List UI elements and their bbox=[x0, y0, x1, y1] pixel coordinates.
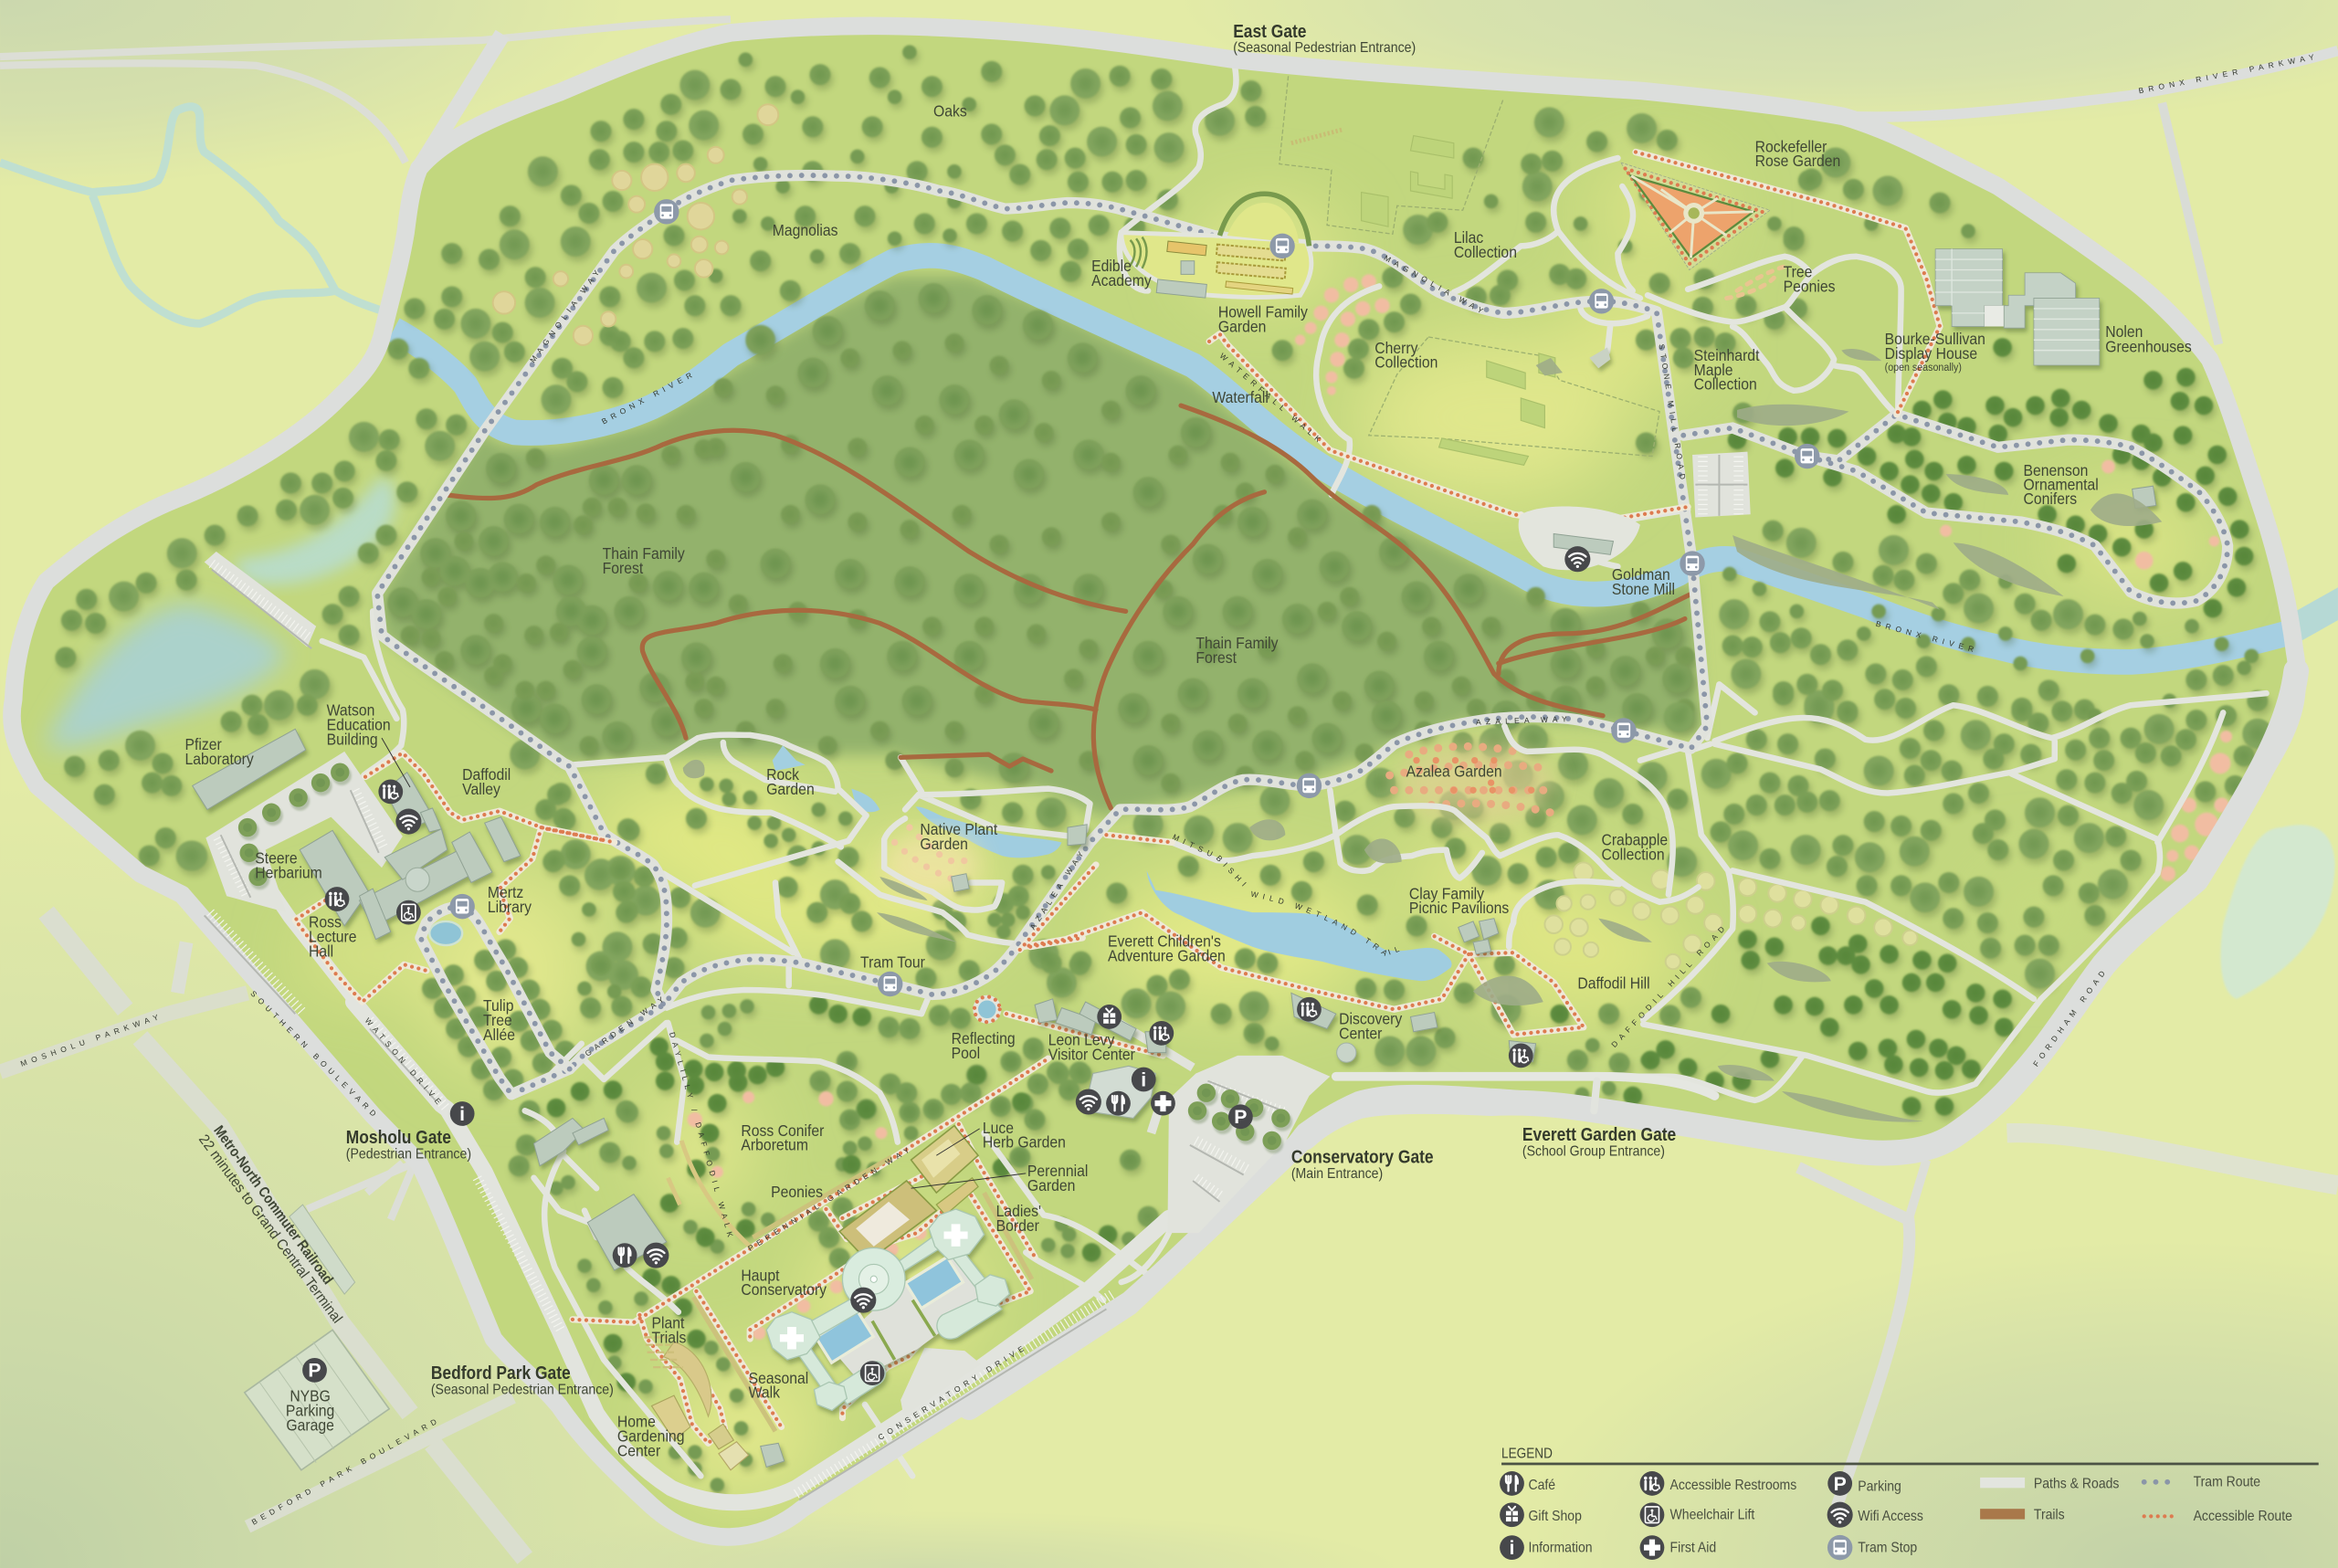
garden labels: Edible bbox=[1091, 257, 1132, 275]
garden labels: Academy bbox=[1091, 271, 1152, 289]
garden labels bbox=[184, 101, 2192, 1460]
garden labels: Lecture bbox=[309, 928, 357, 946]
garden labels: Everett Children's bbox=[1108, 932, 1221, 951]
garden labels: Arboretum bbox=[741, 1136, 808, 1154]
road names: WATSON DRIVE bbox=[363, 1016, 447, 1110]
garden labels: Benenson bbox=[2023, 461, 2088, 479]
garden labels: Luce bbox=[983, 1119, 1014, 1137]
garden labels: Howell Family bbox=[1218, 303, 1308, 321]
pink flowering trees bbox=[688, 274, 2232, 1340]
garden labels: Steere bbox=[255, 848, 298, 868]
other small buildings bbox=[761, 347, 2156, 1467]
garden labels: Waterfall bbox=[1212, 388, 1269, 406]
leader lines bbox=[382, 738, 1026, 1188]
legend: Wifi Access bbox=[1858, 1510, 1923, 1524]
garden labels: Tulip bbox=[483, 996, 514, 1015]
road names: DAYLILLY / DAFFODIL WALK bbox=[668, 1031, 736, 1243]
garden labels: Home bbox=[617, 1413, 656, 1431]
garden labels: Lilac bbox=[1454, 228, 1483, 247]
railroad note: Metro-North Commuter Railroad bbox=[210, 1122, 336, 1288]
garden labels: Maple bbox=[1694, 361, 1733, 379]
garden labels: Garden bbox=[920, 835, 968, 853]
garden labels: Crabapple bbox=[1601, 831, 1668, 849]
road names: AZALEA WAY bbox=[1476, 714, 1572, 727]
garden labels: Oaks bbox=[933, 101, 967, 121]
garden labels: Border bbox=[996, 1216, 1039, 1235]
reflecting pool bbox=[973, 995, 1001, 1024]
garden labels: Garden bbox=[1218, 318, 1266, 336]
road names: DAFFODIL HILL ROAD bbox=[1609, 921, 1730, 1049]
legend: Accessible Restrooms bbox=[1670, 1478, 1796, 1493]
garden labels: Walk bbox=[749, 1384, 781, 1402]
garden labels: Ross Conifer bbox=[741, 1121, 824, 1140]
garden labels: Bourke-Sullivan bbox=[1885, 330, 1985, 348]
garden labels: Collection bbox=[1374, 353, 1438, 372]
garden labels: Steinhardt bbox=[1694, 346, 1759, 364]
gate labels: Everett Garden Gate bbox=[1522, 1125, 1676, 1145]
garden labels: Daffodil bbox=[462, 765, 511, 784]
garden labels: Hall bbox=[309, 942, 333, 961]
legend: Gift Shop bbox=[1528, 1510, 1582, 1524]
garden labels: Haupt bbox=[741, 1267, 779, 1285]
road names: BEDFORD PARK BOULEVARD bbox=[250, 1415, 442, 1527]
garden labels: Forest bbox=[603, 559, 644, 577]
garden labels: Gardening bbox=[617, 1427, 684, 1446]
garden labels: Thain Family bbox=[603, 544, 685, 563]
garden labels: Watson bbox=[327, 701, 374, 720]
garden labels: Garage bbox=[286, 1416, 334, 1435]
faint plan outlines and fields bbox=[1280, 76, 1659, 465]
legend: Accessible Route bbox=[2194, 1510, 2292, 1524]
Bedford gate buildings bbox=[534, 1118, 667, 1270]
garden labels: Parking bbox=[286, 1402, 334, 1420]
garden labels: Conservatory bbox=[741, 1280, 827, 1299]
rocks and ledges bbox=[683, 349, 2162, 1122]
road names: AZALEA WAY bbox=[1028, 846, 1088, 931]
garden labels: Center bbox=[1339, 1024, 1383, 1043]
formal gardens bbox=[644, 1126, 1032, 1470]
map icons: P bbox=[308, 1361, 321, 1382]
Leon Levy Visitor Center buildings bbox=[1035, 999, 1166, 1118]
parking lots and curb ticks bbox=[205, 452, 1751, 1500]
gate labels: (Seasonal Pedestrian Entrance) bbox=[431, 1383, 614, 1398]
gate labels: Bedford Park Gate bbox=[431, 1363, 571, 1384]
map icons: P bbox=[1234, 1107, 1247, 1128]
garden labels: Rock bbox=[766, 765, 799, 784]
Haupt Conservatory bbox=[766, 1209, 1009, 1410]
tram route bbox=[377, 175, 2227, 1094]
legend: Café bbox=[1528, 1478, 1555, 1493]
garden labels: Ross bbox=[309, 913, 342, 931]
garden labels: Laboratory bbox=[184, 750, 254, 768]
garden labels: Clay Family bbox=[1409, 885, 1484, 903]
garden labels: Rose Garden bbox=[1755, 152, 1840, 170]
road names: WATERFALL WALK bbox=[1218, 351, 1326, 447]
gate labels: Mosholu Gate bbox=[346, 1128, 451, 1149]
garden labels: Nolen bbox=[2105, 322, 2143, 341]
gate labels: Conservatory Gate bbox=[1291, 1147, 1434, 1168]
legend: P bbox=[1834, 1474, 1847, 1495]
map icons: i bbox=[1141, 1069, 1146, 1090]
garden labels: Thain Family bbox=[1195, 634, 1278, 652]
garden labels: Magnolias bbox=[773, 221, 837, 239]
road names: MITSUBISHI WILD WETLAND TRAIL bbox=[1173, 834, 1399, 956]
legend: LEGEND bbox=[1501, 1447, 1553, 1462]
garden labels: Display House bbox=[1885, 344, 1977, 363]
garden labels: Cherry bbox=[1374, 339, 1418, 357]
paths and roads bbox=[322, 66, 2267, 1476]
azalea, native plant and peony beds bbox=[884, 266, 1789, 898]
garden labels: Collection bbox=[1601, 846, 1665, 864]
garden labels: Herb Garden bbox=[983, 1133, 1066, 1152]
garden labels: Center bbox=[617, 1442, 661, 1460]
garden labels: Building bbox=[327, 731, 378, 749]
trails bbox=[448, 405, 1692, 808]
garden labels: Greenhouses bbox=[2105, 337, 2192, 356]
gate labels: (Main Entrance) bbox=[1291, 1166, 1383, 1182]
garden labels: Garden bbox=[766, 780, 815, 798]
garden labels: Conifers bbox=[2023, 489, 2077, 508]
garden labels: (open seasonally) bbox=[1885, 362, 1962, 374]
garden labels: Collection bbox=[1454, 243, 1517, 261]
Goldman Stone Mill bbox=[1519, 507, 1640, 570]
garden labels: Leon Levy bbox=[1048, 1031, 1114, 1049]
map icons: i bbox=[459, 1104, 465, 1125]
garden labels: Goldman bbox=[1612, 565, 1670, 584]
river: Bronx River bbox=[394, 256, 2286, 662]
road names: PERENNIAL GARDEN WAY bbox=[746, 1142, 915, 1253]
garden labels: Azalea Garden bbox=[1406, 763, 1502, 781]
road names: MAGNOLIA WAY bbox=[528, 265, 604, 364]
garden labels: Tree bbox=[483, 1011, 512, 1029]
garden labels: NYBG bbox=[290, 1387, 331, 1405]
road names: GARDEN WAY bbox=[583, 992, 669, 1058]
legend: Tram Stop bbox=[1858, 1541, 1917, 1556]
Rockefeller Rose Garden bbox=[1621, 163, 1770, 269]
greenhouses: Nolen and Bourke-Sullivan bbox=[1935, 249, 2100, 365]
garden labels: Peonies bbox=[1784, 277, 1836, 296]
railroad note: 22 minutes to Grand Central Terminal bbox=[195, 1131, 345, 1326]
Thain Family Forest ground bbox=[377, 276, 1702, 817]
garden labels: Picnic Pavilions bbox=[1409, 899, 1509, 917]
garden labels: Visitor Center bbox=[1048, 1046, 1135, 1064]
stream outside park bbox=[0, 107, 380, 323]
gate labels: (Seasonal Pedestrian Entrance) bbox=[1233, 41, 1416, 56]
gate labels bbox=[346, 22, 1676, 1398]
garden labels: Daffodil Hill bbox=[1577, 974, 1650, 993]
magnolia trees bbox=[493, 104, 778, 345]
legend: Parking bbox=[1858, 1479, 1901, 1495]
garden labels: Discovery bbox=[1339, 1010, 1402, 1028]
garden labels: Perennial bbox=[1027, 1162, 1088, 1180]
garden labels: Education bbox=[327, 716, 391, 734]
gate labels: (Pedestrian Entrance) bbox=[346, 1147, 471, 1163]
garden labels: Forest bbox=[1195, 648, 1237, 667]
accessible routes bbox=[295, 153, 1940, 1443]
garden labels: Seasonal bbox=[749, 1369, 808, 1387]
legend: i bbox=[1510, 1538, 1514, 1559]
road names: MOSHOLU PARKWAY bbox=[19, 1011, 164, 1068]
garden labels: Collection bbox=[1694, 375, 1757, 394]
road names: FORDHAM ROAD bbox=[2031, 965, 2110, 1068]
garden labels: Tree bbox=[1784, 263, 1812, 281]
road names: STONE MILL ROAD bbox=[1657, 343, 1689, 485]
legend: Tram Route bbox=[2194, 1475, 2260, 1490]
garden labels: Tram Tour bbox=[860, 953, 925, 972]
garden labels: Stone Mill bbox=[1612, 580, 1675, 598]
garden labels: Ornamental bbox=[2023, 476, 2099, 494]
road names: SOUTHERN BOULEVARD bbox=[248, 989, 382, 1121]
legend: Information bbox=[1528, 1541, 1593, 1556]
garden labels: Valley bbox=[462, 780, 500, 798]
parking lot trees bbox=[247, 773, 1282, 1144]
garden labels: Mertz bbox=[488, 883, 523, 901]
road names: BRONX RIVER bbox=[1875, 619, 1979, 655]
lakes and ponds bbox=[45, 477, 1452, 981]
garden labels: Rockefeller bbox=[1755, 138, 1827, 156]
Watson complex buildings bbox=[193, 729, 521, 940]
crabapple and daffodil trees bbox=[1544, 862, 1918, 969]
garden labels: Peonies bbox=[771, 1183, 823, 1201]
garden labels: Native Plant bbox=[920, 820, 997, 838]
legend bbox=[1500, 1447, 2319, 1560]
garden labels: Allée bbox=[483, 1026, 515, 1044]
garden labels: Reflecting bbox=[952, 1029, 1016, 1047]
road names: CONSERVATORY DRIVE bbox=[876, 1342, 1029, 1442]
garden labels: Library bbox=[488, 898, 532, 916]
garden labels: Trials bbox=[651, 1328, 686, 1347]
garden labels: Garden bbox=[1027, 1176, 1075, 1194]
garden labels: Ladies' bbox=[996, 1202, 1041, 1220]
Edible Academy bbox=[1122, 194, 1311, 298]
legend: Paths & Roads bbox=[2034, 1477, 2119, 1492]
road names: BRONX RIVER PARKWAY bbox=[2138, 51, 2320, 95]
garden labels: Plant bbox=[651, 1314, 684, 1332]
garden labels: Adventure Garden bbox=[1108, 946, 1226, 965]
road names: MAGNOLIA WAY bbox=[1383, 253, 1489, 318]
NYBG parking garage and rail platform bbox=[245, 1205, 389, 1470]
gate labels: East Gate bbox=[1233, 22, 1306, 42]
map icons bbox=[302, 199, 1819, 1385]
garden labels: Pool bbox=[952, 1044, 980, 1062]
garden labels: Herbarium bbox=[255, 863, 322, 882]
gate labels: (School Group Entrance) bbox=[1522, 1144, 1665, 1159]
road names: BRONX RIVER bbox=[600, 368, 698, 426]
legend: First Aid bbox=[1670, 1541, 1716, 1556]
legend: Trails bbox=[2034, 1508, 2065, 1523]
garden labels: Pfizer bbox=[184, 735, 222, 753]
legend: Wheelchair Lift bbox=[1670, 1508, 1754, 1523]
